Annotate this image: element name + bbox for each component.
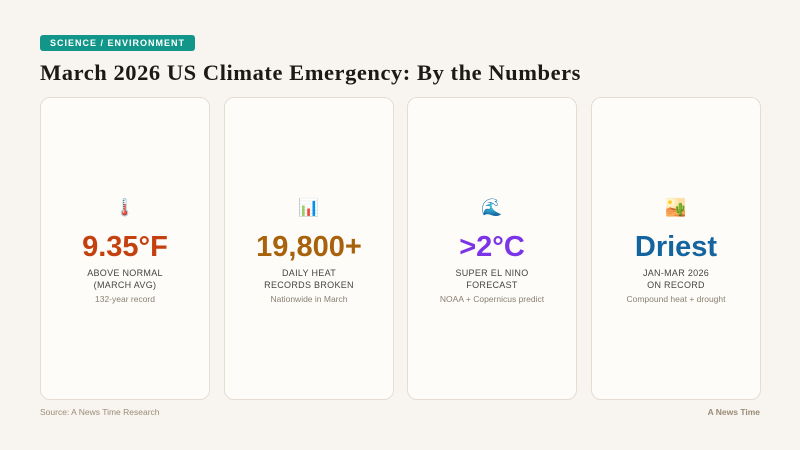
sublabel: NOAA + Copernicus predict	[440, 294, 544, 304]
label: SUPER EL NINO	[455, 268, 529, 278]
title: March 2026 US Climate Emergency: By the Numbers	[40, 60, 581, 85]
category tag: SCIENCE / ENVIRONMENT	[50, 38, 185, 48]
brand footer: A News Time	[708, 407, 760, 417]
category tag	[40, 35, 195, 51]
icon: wave: 🌊	[481, 198, 503, 217]
icon: thermometer: 🌡️	[114, 198, 136, 217]
icon: bar chart: 📊	[298, 198, 320, 217]
stat number: Driest	[635, 231, 717, 263]
label: RECORDS BROKEN	[264, 280, 354, 290]
label	[643, 268, 709, 290]
panel: driest	[591, 97, 761, 400]
sublabel: Nationwide in March	[270, 294, 348, 304]
sublabel: Compound heat + drought	[626, 294, 726, 304]
sublabel: 132-year record	[95, 294, 155, 304]
stat number: >2°C	[459, 231, 525, 263]
icon: desert: 🏜️	[665, 198, 687, 217]
stat number: 9.35°F	[82, 231, 168, 263]
panel: heat records	[224, 97, 394, 400]
label: (MARCH AVG)	[94, 280, 156, 290]
label: ON RECORD	[647, 280, 705, 290]
source footer: Source: A News Time Research	[40, 407, 160, 417]
label	[455, 268, 529, 290]
label	[87, 268, 163, 290]
label: FORECAST	[466, 280, 518, 290]
label: ABOVE NORMAL	[87, 268, 163, 278]
panel: el nino	[407, 97, 577, 400]
panel: temperature	[40, 97, 210, 400]
label	[264, 268, 354, 290]
stat number: 19,800+	[256, 231, 362, 263]
label: DAILY HEAT	[282, 268, 336, 278]
label: JAN-MAR 2026	[643, 268, 709, 278]
